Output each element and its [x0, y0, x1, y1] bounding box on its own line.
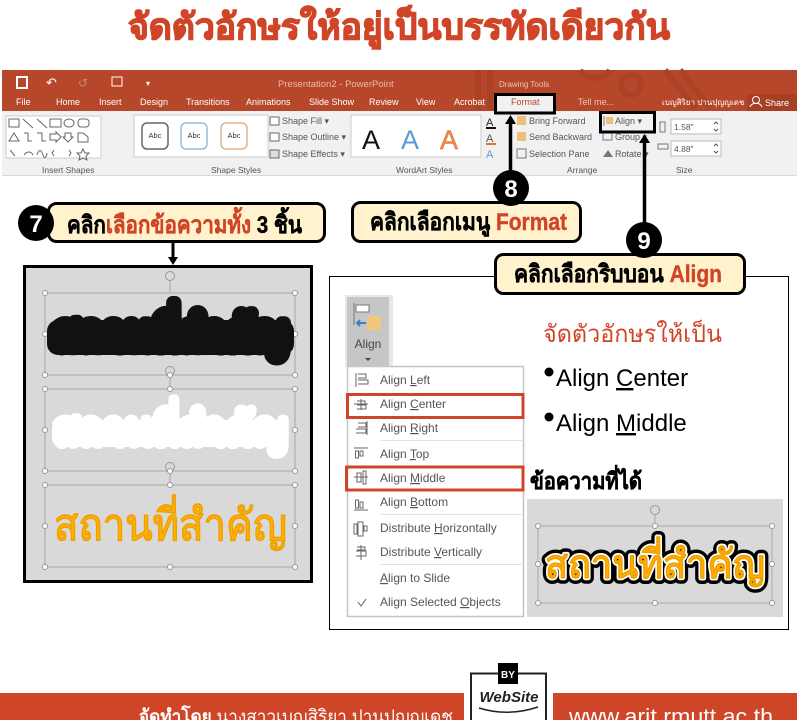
insert shapes gallery: [6, 116, 101, 160]
quick access toolbar: [17, 75, 150, 90]
panel: align menu and result: [330, 276, 788, 630]
align dropdown menu: Align Left: [380, 373, 431, 387]
black outline text: สถานที่สำคัญ: [54, 302, 287, 358]
WordArt gallery: A: [401, 125, 419, 155]
ribbon tabs: Insert: [99, 97, 122, 107]
text style buttons: A: [486, 149, 494, 161]
text style buttons: [486, 117, 496, 161]
align dropdown menu: Distribute Vertically: [380, 545, 482, 559]
list: align options: Align Center: [556, 365, 688, 392]
callout: step 7: 7: [29, 211, 43, 238]
align dropdown menu: Align to Slide: [380, 571, 450, 585]
heading: align instructions: จัดตัวอักษรให้เป็น: [543, 319, 722, 348]
align button: [345, 295, 393, 367]
list: align options: Align Middle: [556, 410, 687, 437]
shape fill outline effects: Shape Effects ▾: [282, 149, 345, 159]
arrange group: Rotate ▾: [615, 149, 649, 159]
ribbon tabs: Acrobat: [454, 97, 486, 107]
ribbon tabs: Tell me...: [578, 97, 614, 107]
arrange group: Selection Pane: [529, 149, 590, 159]
shape styles gallery: [134, 115, 268, 157]
align dropdown menu: Distribute Horizontally: [380, 521, 497, 535]
callout: step 9: 9: [637, 228, 651, 255]
ribbon tabs: Animations: [246, 97, 291, 107]
callout: step 8: คลิกเลือกเมนู Format: [370, 209, 567, 237]
highlight: Format tab: [496, 94, 554, 113]
arrow: step 7 to panel: [168, 243, 178, 265]
WordArt gallery: A: [440, 125, 458, 155]
panel: three selected text layers: [24, 266, 312, 582]
align dropdown menu: Align Top: [380, 447, 429, 461]
align button: Align: [355, 337, 381, 351]
title: จัดตัวอักษรให้อยู่เป็นบรรทัดเดียวกัน: [128, 4, 670, 50]
ribbon tabs: Review: [369, 97, 399, 107]
ribbon group labels: Size: [676, 165, 693, 175]
highlight: Align Center: [348, 394, 523, 418]
format tab: Format: [511, 97, 540, 107]
result image: สถานที่สำคัญ: [545, 537, 765, 587]
arrange group: Send Backward: [529, 132, 592, 142]
ribbon group labels: Shape Styles: [211, 165, 261, 175]
share button: Share: [765, 98, 789, 108]
arrange group: Bring Forward: [529, 116, 586, 126]
arrange group: Group ▾: [615, 132, 648, 142]
menu icons: [354, 373, 368, 606]
ribbon tabs: Home: [56, 97, 80, 107]
by website badge: WebSite: [480, 689, 538, 706]
share button: [747, 94, 797, 111]
ribbon tabs: Slide Show: [309, 97, 355, 107]
align dropdown menu: Align Right: [380, 421, 439, 435]
ribbon group labels: Arrange: [567, 165, 598, 175]
highlight: Align Middle: [346, 467, 523, 490]
text style buttons: A: [486, 133, 494, 145]
result image: [527, 499, 783, 617]
footer band: [0, 693, 797, 720]
size group: [658, 119, 721, 156]
arrange group: [517, 116, 649, 159]
callout: step 9: [496, 222, 744, 294]
ribbon tabs: File: [16, 97, 31, 107]
ribbon tabs: Transitions: [186, 97, 230, 107]
align dropdown menu: Align Center: [380, 397, 446, 411]
arrow: step 8 to Format: [505, 115, 516, 172]
shape styles gallery: Abc: [149, 131, 162, 140]
align dropdown menu: [348, 366, 524, 616]
ribbon group labels: WordArt Styles: [396, 165, 453, 175]
white outline text: สถานที่สำคัญ: [54, 398, 287, 454]
shape fill outline effects: [270, 116, 347, 159]
align dropdown menu: Align Selected Objects: [380, 595, 501, 609]
callout: step 8: 8: [504, 176, 518, 203]
ribbon decorative pattern: [478, 70, 710, 110]
size group: 4.88": [674, 144, 694, 154]
highlight: Align button: [600, 112, 654, 132]
result image: สถานที่สำคัญ: [545, 537, 765, 587]
quick access toolbar: ▾: [146, 79, 150, 88]
ribbon tabs: Design: [140, 97, 168, 107]
PowerPoint ribbon screenshot: Drawing Tools: [499, 80, 549, 89]
shape fill outline effects: Shape Outline ▾: [282, 132, 347, 142]
result image: สถานที่สำคัญ: [545, 537, 765, 587]
ribbon tabs: [16, 97, 745, 107]
PowerPoint ribbon screenshot: [2, 70, 797, 176]
quick access toolbar: ↺: [78, 76, 88, 90]
by website badge: BY: [501, 670, 515, 681]
shape styles gallery: Abc: [188, 131, 201, 140]
shape styles gallery: Abc: [228, 131, 241, 140]
WordArt gallery: A: [362, 125, 380, 155]
format tab: [495, 94, 555, 113]
quick access toolbar: ↶: [46, 75, 57, 90]
orange text: สถานที่สำคัญ: [54, 494, 287, 550]
callout: step 7: [18, 204, 324, 242]
window title: Presentation2 - PowerPoint: [278, 79, 394, 90]
size group: 1.58": [674, 122, 694, 132]
ribbon group labels: Insert Shapes: [42, 165, 94, 175]
ribbon tabs: View: [416, 97, 436, 107]
callout: step 7: คลิกเลือกข้อความทั้ง 3 ชิ้น: [67, 206, 302, 239]
by website badge: [471, 663, 546, 720]
shape fill outline effects: Shape Fill ▾: [282, 116, 330, 126]
callout: step 9: คลิกเลือกริบบอน Align: [514, 261, 722, 288]
ribbon group labels: [42, 165, 693, 175]
arrange group: Align ▾: [615, 116, 643, 126]
align dropdown menu: Align Middle: [380, 471, 446, 485]
align dropdown menu: Align Bottom: [380, 495, 448, 509]
ribbon tabs: เบญสิริยา ปานปุญญเดช: [662, 98, 745, 107]
heading: result: ข้อความที่ได้: [530, 464, 642, 494]
callout: step 8: [352, 170, 580, 242]
arrow: step 9 to Align: [639, 134, 650, 224]
list: align options: [544, 365, 688, 437]
WordArt gallery: [351, 115, 481, 157]
text style buttons: A: [486, 117, 494, 129]
